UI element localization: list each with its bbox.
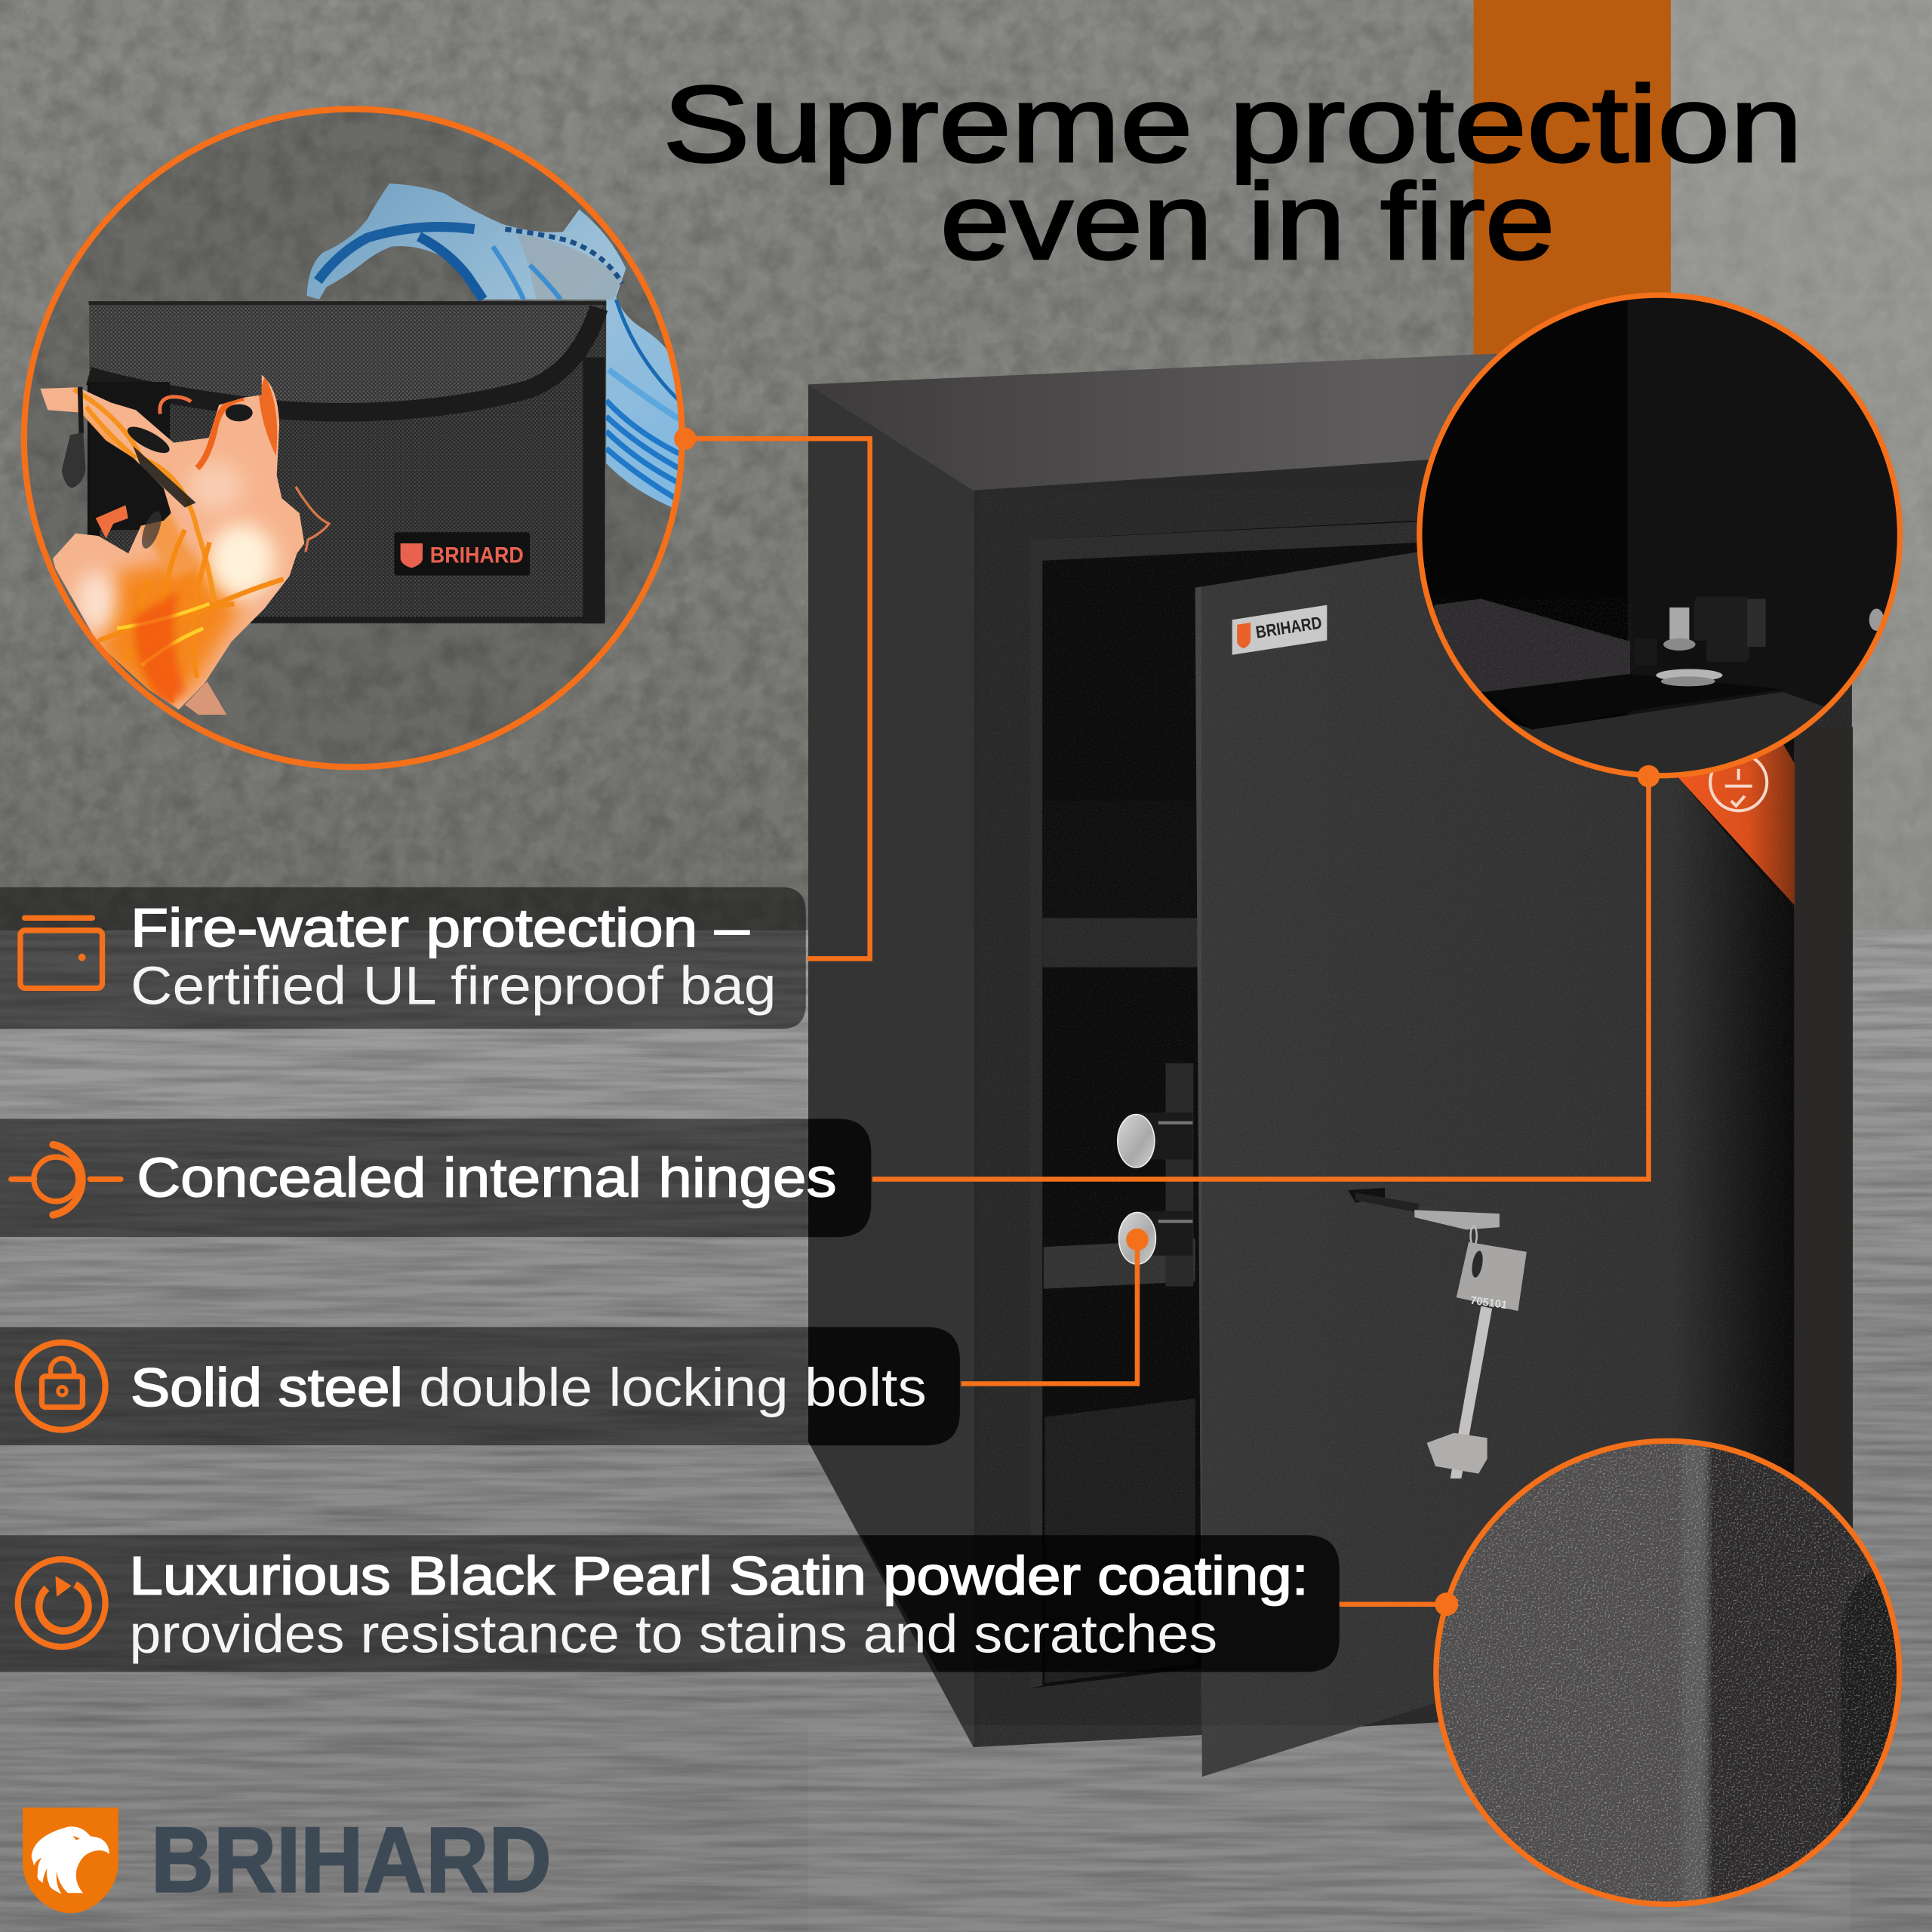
safe xyxy=(808,354,1868,1777)
door badge: BRIHARD xyxy=(1254,612,1323,642)
icon: cycle xyxy=(18,1559,106,1647)
callout circle: powder coating texture xyxy=(1435,1435,1906,1916)
safe door xyxy=(1195,542,1794,1777)
carpet xyxy=(1429,598,1630,692)
heading: luxurious black pearl satin: Luxurious Black Pearl Satin powder coating: xyxy=(129,1546,1309,1607)
water splash xyxy=(307,183,679,510)
safe left side face xyxy=(808,384,974,1747)
text: concealed internal hinges: Concealed internal hinges xyxy=(137,1146,837,1208)
door top plane xyxy=(1417,690,1825,789)
panel: concealed hinges band xyxy=(0,1118,871,1237)
title: Supreme protection xyxy=(663,64,1803,185)
safe interior xyxy=(1030,518,1794,1688)
interior upper shelf xyxy=(1042,918,1202,968)
panel: locking bolts band xyxy=(0,1327,960,1445)
locking bolts xyxy=(1118,1063,1193,1286)
panel: fire-water protection band xyxy=(0,888,806,1029)
hinge pin xyxy=(1669,608,1689,639)
key xyxy=(1348,1188,1527,1478)
black ledge xyxy=(1484,674,1783,730)
orange sticker xyxy=(1678,740,1795,906)
interior lower shelf xyxy=(1044,1238,1195,1289)
icon: hinge xyxy=(11,1145,121,1215)
connector: hinges band to hinge circle xyxy=(872,765,1660,1179)
callout circle: hinge close-up xyxy=(1417,290,1905,789)
connector: bolts band to bolt xyxy=(961,1229,1149,1383)
interior carpet xyxy=(1044,1398,1195,1683)
right frame xyxy=(1795,727,1853,1700)
title xyxy=(663,64,1803,282)
heading: fire-water protection: Fire-water protection – xyxy=(131,898,749,958)
logo: Brihard xyxy=(23,1807,552,1913)
icon: wallet xyxy=(20,918,103,988)
flames xyxy=(31,370,329,721)
upper bolt xyxy=(1118,1112,1192,1168)
flame holes xyxy=(124,422,173,458)
logo wordmark: BRIHARD xyxy=(151,1808,552,1912)
text: double locking bolts: double locking bolts xyxy=(419,1358,927,1418)
hinge bracket xyxy=(1694,596,1749,662)
panel: powder coating band xyxy=(0,1535,1340,1672)
bag body xyxy=(89,302,606,623)
icon: padlock xyxy=(18,1343,106,1430)
callout circle: fireproof bag xyxy=(22,107,684,769)
safe front frame xyxy=(974,431,1852,1747)
text: provides resistance: provides resistance to stains and scratches xyxy=(129,1604,1217,1664)
text: solid steel: Solid steel xyxy=(131,1358,403,1418)
background: concrete wall xyxy=(0,0,1932,937)
flame wisps xyxy=(96,505,128,538)
connector: bag to fire-water band xyxy=(674,428,870,958)
key: 705101 xyxy=(1469,1294,1508,1312)
safe top face xyxy=(808,354,1852,491)
zipper pull xyxy=(62,387,85,488)
title: even in fire xyxy=(940,162,1555,282)
bag binding xyxy=(89,303,606,623)
bag flap xyxy=(89,302,604,412)
background: orange wall stripe xyxy=(1474,0,1671,370)
door badge xyxy=(1232,605,1327,655)
hinge nut xyxy=(1634,638,1659,666)
bag label: BRIHARD xyxy=(430,543,524,568)
text: certified UL fireproof bag: Certified UL fireproof bag xyxy=(131,956,777,1017)
screw xyxy=(1869,609,1884,631)
background: concrete floor xyxy=(0,931,1932,1932)
connector: coating band to coating circle xyxy=(1340,1592,1458,1616)
bag label xyxy=(394,532,530,575)
faint reflection overlay xyxy=(808,1725,1850,1932)
icon: eagle shield xyxy=(23,1807,118,1913)
lower bolt xyxy=(1118,1211,1192,1264)
